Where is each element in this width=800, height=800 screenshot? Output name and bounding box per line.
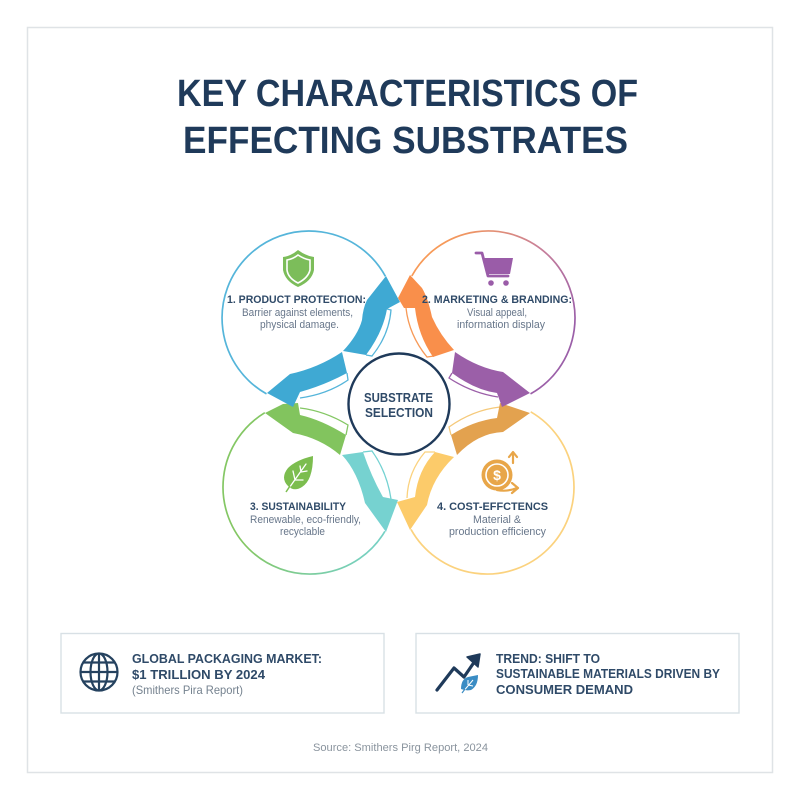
text: product protection [227, 294, 366, 331]
text: cost efficiency: production efficiency [449, 526, 546, 538]
text: product protection: physical damage. [260, 319, 339, 331]
icon: shopping cart [476, 253, 513, 286]
arrow: teal band [342, 452, 398, 532]
text: cost efficiency: 4. COST-EFFCTENCS [437, 501, 548, 513]
arrow: purple band [452, 352, 530, 407]
text: cost efficiency [437, 501, 548, 538]
panel: trend [416, 634, 739, 713]
arrow: blue upper band [343, 276, 400, 355]
text: sustainability: recyclable [280, 526, 325, 538]
icon: leaf [284, 456, 313, 492]
panel: global packaging market: (Smithers Pira Report) [132, 683, 243, 697]
panel: cost efficiency circle [407, 407, 574, 574]
panel: sustainability circle [223, 408, 391, 574]
text: marketing and branding: Visual appeal, [467, 307, 527, 319]
icon: globe [80, 654, 118, 690]
text: marketing and branding: information display [457, 319, 545, 331]
central circle: substrate selection [348, 354, 450, 454]
text: marketing and branding: 2. MARKETING & BRANDING: [422, 294, 572, 306]
source note: Source: Smithers Pirg Report, 2024 [313, 742, 488, 754]
icon: rising arrow with leaf [437, 654, 480, 693]
arrow: blue lower band [267, 352, 347, 407]
arrow: orange band [398, 275, 454, 357]
text: sustainability: Renewable, eco-friendly, [250, 514, 361, 526]
central circle: substrate selection: SELECTION [365, 406, 433, 420]
panel: trend: CONSUMER DEMAND [496, 682, 633, 697]
text: product protection: 1. PRODUCT PROTECTION: [227, 294, 366, 306]
panel: trend: TREND: SHIFT TO [496, 651, 600, 666]
text: product protection: Barrier against elements, [242, 307, 353, 319]
text: sustainability: 3. SUSTAINABILITY [250, 501, 347, 513]
arrow: gold band [451, 403, 530, 455]
panel: global packaging market: $1 TRILLION BY 2024 [132, 667, 266, 682]
panel: global packaging market: GLOBAL PACKAGING MARKET: [132, 651, 322, 666]
panel: trend: SUSTAINABLE MATERIALS DRIVEN BY [496, 666, 720, 681]
title [177, 73, 638, 162]
arrow: yellow band [397, 452, 454, 530]
arrow: green band [265, 403, 346, 455]
text: cost efficiency: Material & [473, 514, 522, 526]
diagram: four overlapping circles [222, 231, 575, 574]
panel: marketing circle [406, 231, 575, 397]
panel: product protection circle [222, 231, 391, 398]
central circle: substrate selection: SUBSTRATE [364, 391, 433, 405]
title: EFFECTING SUBSTRATES [183, 120, 628, 162]
panel: global packaging market [61, 634, 384, 713]
title: KEY CHARACTERISTICS OF [177, 73, 638, 115]
icon: shield [283, 250, 314, 287]
text: sustainability [250, 501, 361, 538]
icon: coin with arrows: $ [493, 467, 501, 483]
icon: coin with arrows [482, 452, 518, 493]
text: marketing and branding [422, 294, 572, 331]
